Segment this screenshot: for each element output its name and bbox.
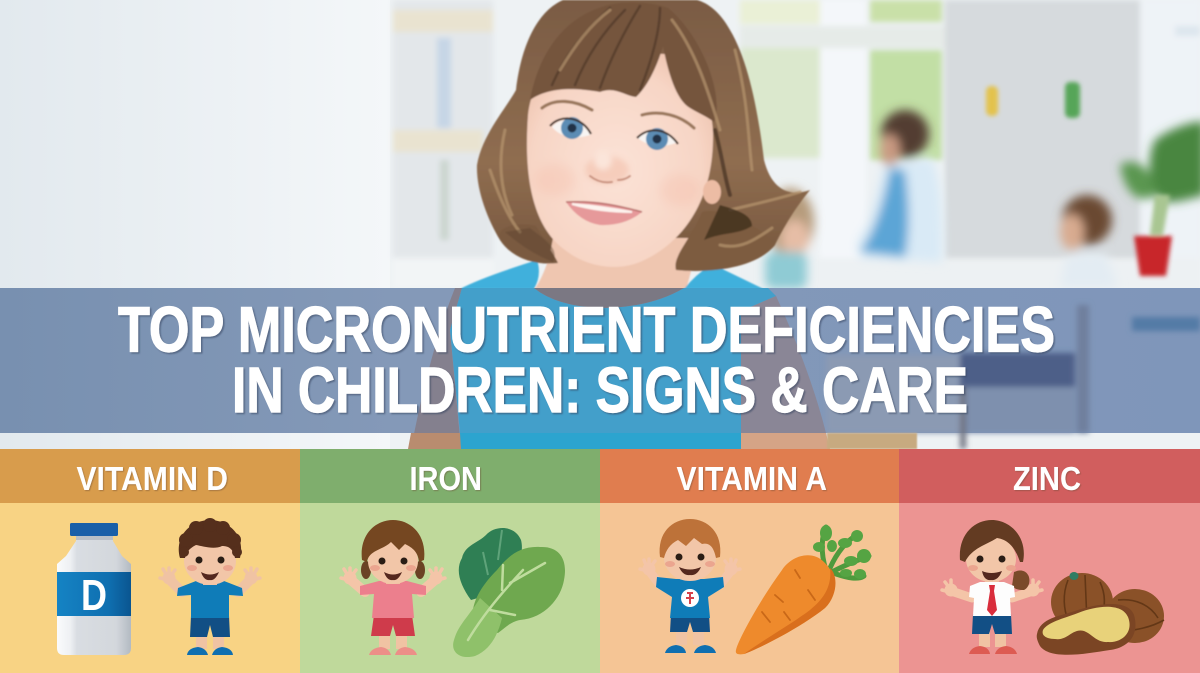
shirt top above band xyxy=(460,260,776,294)
hair foreground left xyxy=(499,224,558,264)
nose xyxy=(585,156,629,184)
icon: vitamin D bottle xyxy=(57,523,131,655)
heading: iron xyxy=(300,449,600,503)
heading: zinc xyxy=(899,449,1200,503)
blurred child with brown hair xyxy=(1060,195,1118,288)
heading: vitamin A: VITAMIN A xyxy=(676,460,827,497)
neck xyxy=(534,238,700,290)
girl portrait xyxy=(460,0,810,294)
heading: zinc: ZINC xyxy=(1013,460,1081,497)
heading: vitamin A xyxy=(600,449,899,503)
hair strands xyxy=(490,6,800,246)
blurred child in blue xyxy=(857,110,942,262)
panel: iron xyxy=(300,449,600,673)
hair foreground right xyxy=(675,211,775,271)
heading: iron: IRON xyxy=(410,460,482,497)
icon: spinach leaves xyxy=(453,528,565,657)
panel: vitamin D xyxy=(0,449,300,673)
smile xyxy=(566,201,642,225)
icon: boy in blue shirt xyxy=(160,518,260,655)
panel: zinc xyxy=(899,449,1200,673)
panel: vitamin A xyxy=(600,449,899,673)
eyes xyxy=(550,117,678,150)
icon: carrot xyxy=(736,525,871,654)
cheeks xyxy=(535,164,700,206)
title: IN CHILDREN: SIGNS & CARE xyxy=(232,354,968,426)
blurred blond child xyxy=(765,188,814,289)
eyebrows xyxy=(542,101,592,110)
shadow under hair xyxy=(704,205,752,240)
girl torso through band xyxy=(408,288,917,449)
face xyxy=(527,50,713,267)
blurred plant xyxy=(1120,122,1200,202)
icon: boy with emblem shirt xyxy=(640,519,740,653)
hair back xyxy=(477,0,810,270)
heading: vitamin D xyxy=(0,449,300,503)
icon: girl in pink shirt xyxy=(341,520,445,655)
blurred plant pot xyxy=(1134,195,1172,276)
title band xyxy=(0,288,1200,433)
icon: walnuts xyxy=(1037,572,1164,655)
photo background: blurred classroom xyxy=(0,0,1200,450)
heading: vitamin D: VITAMIN D xyxy=(76,460,228,497)
icon: girl in school uniform xyxy=(942,520,1042,654)
wall tags xyxy=(986,82,1080,118)
bangs xyxy=(530,2,717,122)
band overlay: blurred furniture xyxy=(826,305,1200,449)
ear xyxy=(703,180,721,204)
icon: vitamin D bottle: D xyxy=(81,571,107,620)
title xyxy=(118,294,1055,426)
